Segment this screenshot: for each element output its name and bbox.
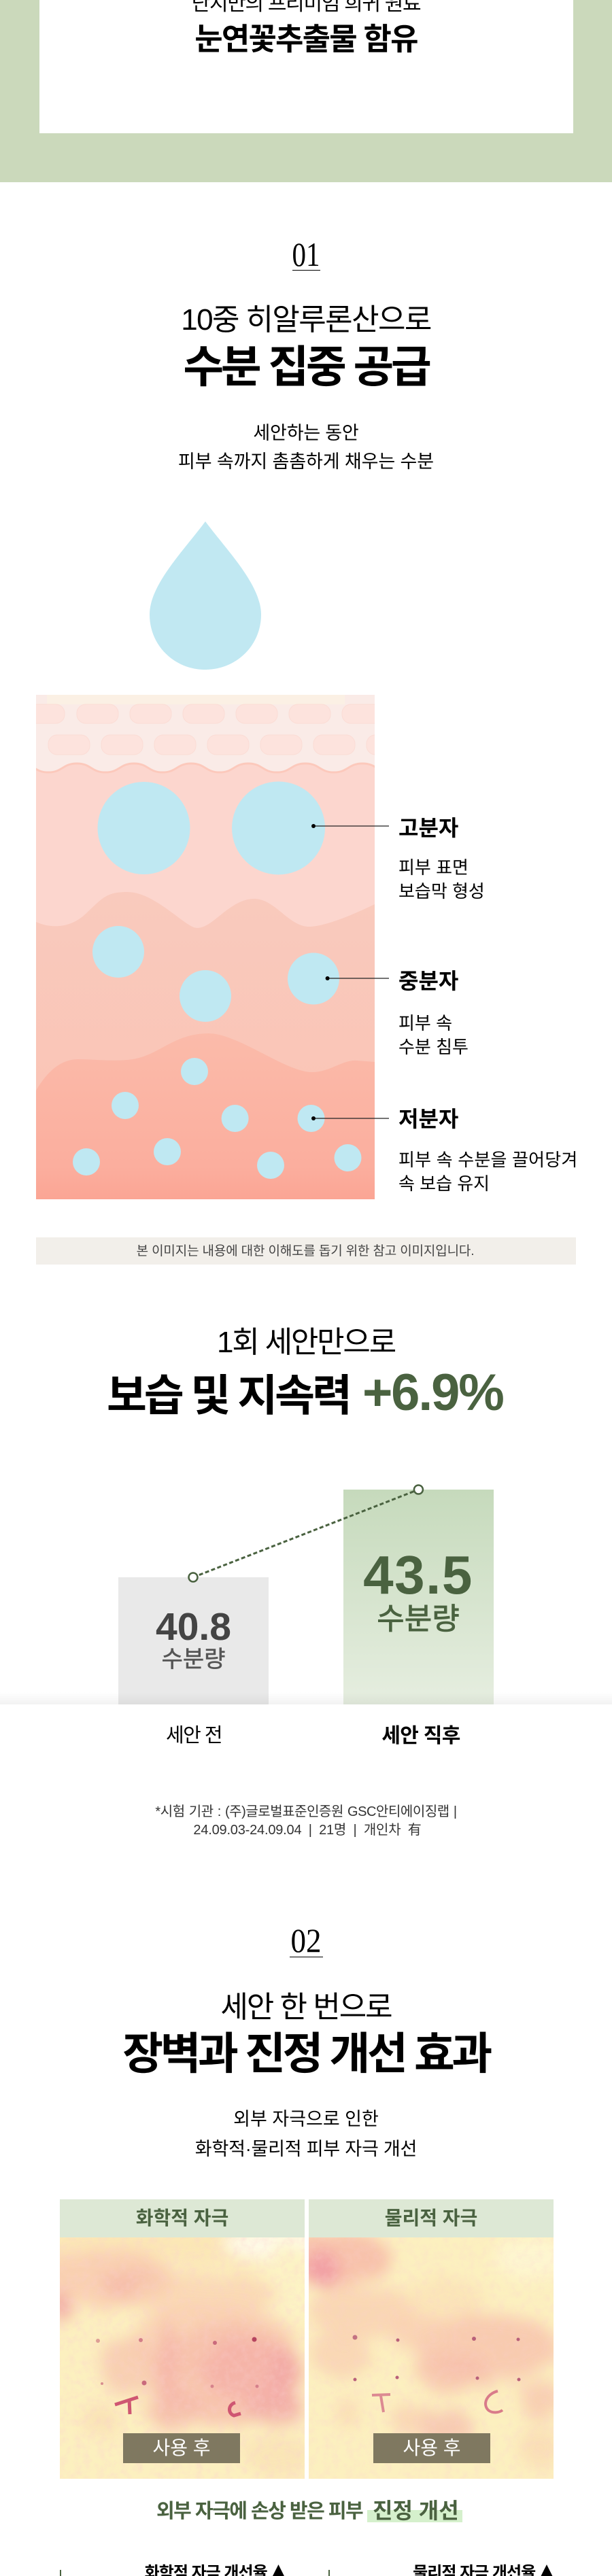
chart heading: 보습 및 지속력 [107,1371,350,1420]
panel header text: physical irritation: 물리적 자극 [385,2208,477,2229]
unit: after: 수분량 [377,1602,460,1636]
disclaimer text: 본 이미지는 내용에 대한 이해도를 돕기 위한 참고 이미지입니다. [137,1244,474,1258]
middle dermis layer [36,892,375,1090]
section 1 description line 1: 세안하는 동안 [253,423,359,443]
top banner: green background [0,0,612,182]
trend line [189,1485,423,1581]
label: high molecular: 고분자 [398,816,458,840]
section 1 subtitle: 10중 히알루론산으로 [181,303,431,337]
irritation marks [96,2337,258,2416]
description: high molecular line 2: 보습막 형성 [398,881,485,901]
unit: before: 수분량 [162,1647,225,1672]
axis label: after: 세안 직후 [381,1725,460,1747]
description: medium molecular line 1: 피부 속 [398,1013,452,1033]
bar chart [118,1484,494,1704]
section 1 description line 2: 피부 속까지 촘촘하게 채우는 수분 [178,451,434,472]
panel header text: chemical irritation: 화학적 자극 [136,2208,228,2229]
baseline shadow [0,1692,612,1704]
section number 01: 01 [292,235,320,273]
bar: after [343,1490,494,1704]
photo: chemical irritation skin test [60,2237,305,2479]
photo: physical irritation skin test [309,2237,554,2479]
badge: after use (right) [373,2433,490,2463]
badge: after use (right): 사용 후 [403,2437,461,2458]
description: low molecular line 2: 속 보습 유지 [398,1173,490,1194]
label: medium molecular: 중분자 [398,969,458,993]
caption highlight [367,2510,462,2522]
section number 02: 02 [291,1921,321,1959]
chart heading highlight value: +6.9% [362,1364,503,1422]
top banner: white card [39,0,573,133]
panel header: chemical irritation [60,2199,305,2237]
skin layer diagram [36,695,389,1199]
stat divider: left [60,2570,61,2576]
label: low molecular: 저분자 [398,1107,458,1131]
chart subtitle: 1회 세안만으로 [217,1326,395,1359]
footnote line 1: *시험 기관 : (주)글로벌표준인증원 GSC안티에이징랩 | [155,1804,457,1819]
bar: before [118,1577,269,1704]
section 2 description line 1: 외부 자극으로 인한 [233,2109,379,2129]
section 2 description line 2: 화학적·물리적 피부 자극 개선 [195,2139,417,2159]
section 2 heading: 장벽과 진정 개선 효과 [122,2029,490,2078]
axis label: before: 세안 전 [166,1725,222,1747]
skin surface layer [36,695,375,771]
value: before: 40.8 [156,1605,231,1649]
disclaimer bar [36,1237,576,1265]
medium molecular weight circles [92,926,339,1022]
footnote line 2: 24.09.03-24.09.04 | 21명 | 개인차 有 [193,1823,422,1838]
stat divider: right [328,2570,330,2576]
badge: after use (left) [123,2433,240,2463]
section 2 subtitle: 세안 한 번으로 [220,1991,392,2024]
irritation marks [352,2335,521,2412]
panel header: physical irritation [309,2199,554,2237]
caption emphasised text: 진정 개선 [373,2498,459,2523]
lower dermis layer [36,1033,375,1199]
upper dermis layer [36,763,375,928]
low molecular weight circles [73,1058,362,1179]
icon: water drop [150,521,261,670]
description: high molecular line 1: 피부 표면 [398,857,469,878]
high molecular weight circles [98,782,325,874]
description: medium molecular line 2: 수분 침투 [398,1037,469,1057]
description: low molecular line 1: 피부 속 수분을 끌어당겨 [398,1150,577,1170]
section number 01 underline [292,270,320,271]
caption text: 외부 자극에 손상 받은 피부 [156,2501,362,2522]
banner heading: 눈연꽃추출물 함유 [194,22,418,56]
badge: after use (left): 사용 후 [152,2437,211,2458]
section 1 heading: 수분 집중 공급 [183,342,429,392]
pointer lines [311,824,389,1120]
value: after: 43.5 [363,1545,473,1605]
